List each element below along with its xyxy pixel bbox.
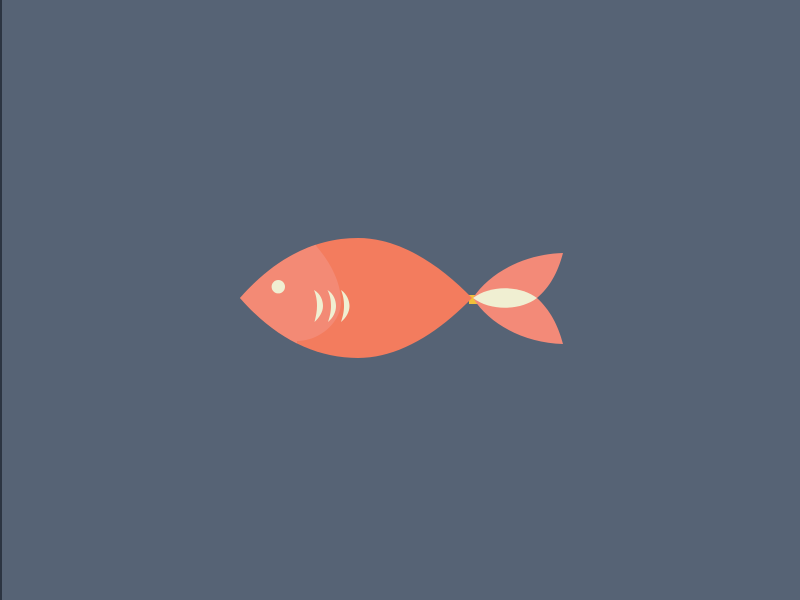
tail connector — [469, 295, 478, 304]
illustration: fish — [0, 0, 563, 600]
fish head highlight — [240, 244, 341, 344]
fish body — [240, 238, 472, 358]
tail fin: centre leaf — [473, 288, 537, 308]
gills — [314, 290, 350, 322]
tail fin: lower lobe — [473, 298, 563, 344]
eye — [272, 280, 285, 293]
tail fin: upper lobe — [473, 253, 563, 298]
